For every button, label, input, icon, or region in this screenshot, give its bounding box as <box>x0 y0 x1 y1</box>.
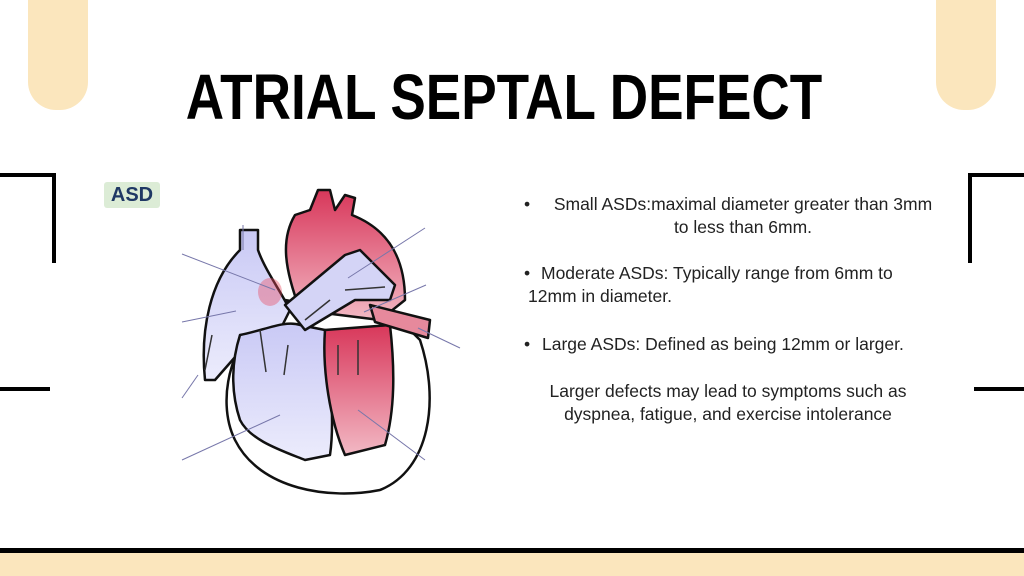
bullet: large: Large ASDs: Defined as being 12mm or larger. <box>542 334 904 354</box>
decorative tab right <box>936 0 996 110</box>
flow arrows <box>205 287 385 375</box>
leader lines <box>182 225 460 460</box>
bullet: small: • <box>524 194 530 214</box>
bullet: moderate <box>524 263 893 306</box>
bullet: small <box>524 194 932 237</box>
left ventricle <box>324 325 393 455</box>
note: dyspnea, fatigue, and exercise intolerance <box>564 404 892 424</box>
footer band <box>0 553 1024 576</box>
note <box>550 381 906 424</box>
vena cava / right atrium <box>204 230 290 380</box>
right bracket <box>968 173 1024 263</box>
bullet: moderate: • <box>524 263 530 283</box>
outer heart <box>227 300 430 493</box>
ASD label <box>104 182 160 208</box>
right ventricle <box>233 324 332 460</box>
bullet: moderate: 12mm in diameter. <box>528 286 672 306</box>
ASD highlight <box>258 278 282 306</box>
ASD label: ASD <box>111 184 153 206</box>
footer line <box>0 548 1024 553</box>
note: Larger defects may lead to symptoms such as <box>550 381 906 401</box>
heart diagram <box>182 188 460 495</box>
text block: ASD sizes <box>524 194 932 424</box>
aorta <box>286 190 405 320</box>
bullet: moderate: Moderate ASDs: Typically range from 6mm to <box>541 263 893 283</box>
decorative tab left <box>28 0 88 110</box>
bullet: small: Small ASDs:maximal diameter greater than 3mm <box>554 194 932 214</box>
pulmonary vein <box>370 305 430 338</box>
left bracket <box>0 173 56 263</box>
bullet: small: to less than 6mm. <box>674 217 812 237</box>
bullet: large: • <box>524 334 530 354</box>
pulmonary artery <box>285 250 395 330</box>
title: ATRIAL SEPTAL DEFECT <box>186 61 822 133</box>
